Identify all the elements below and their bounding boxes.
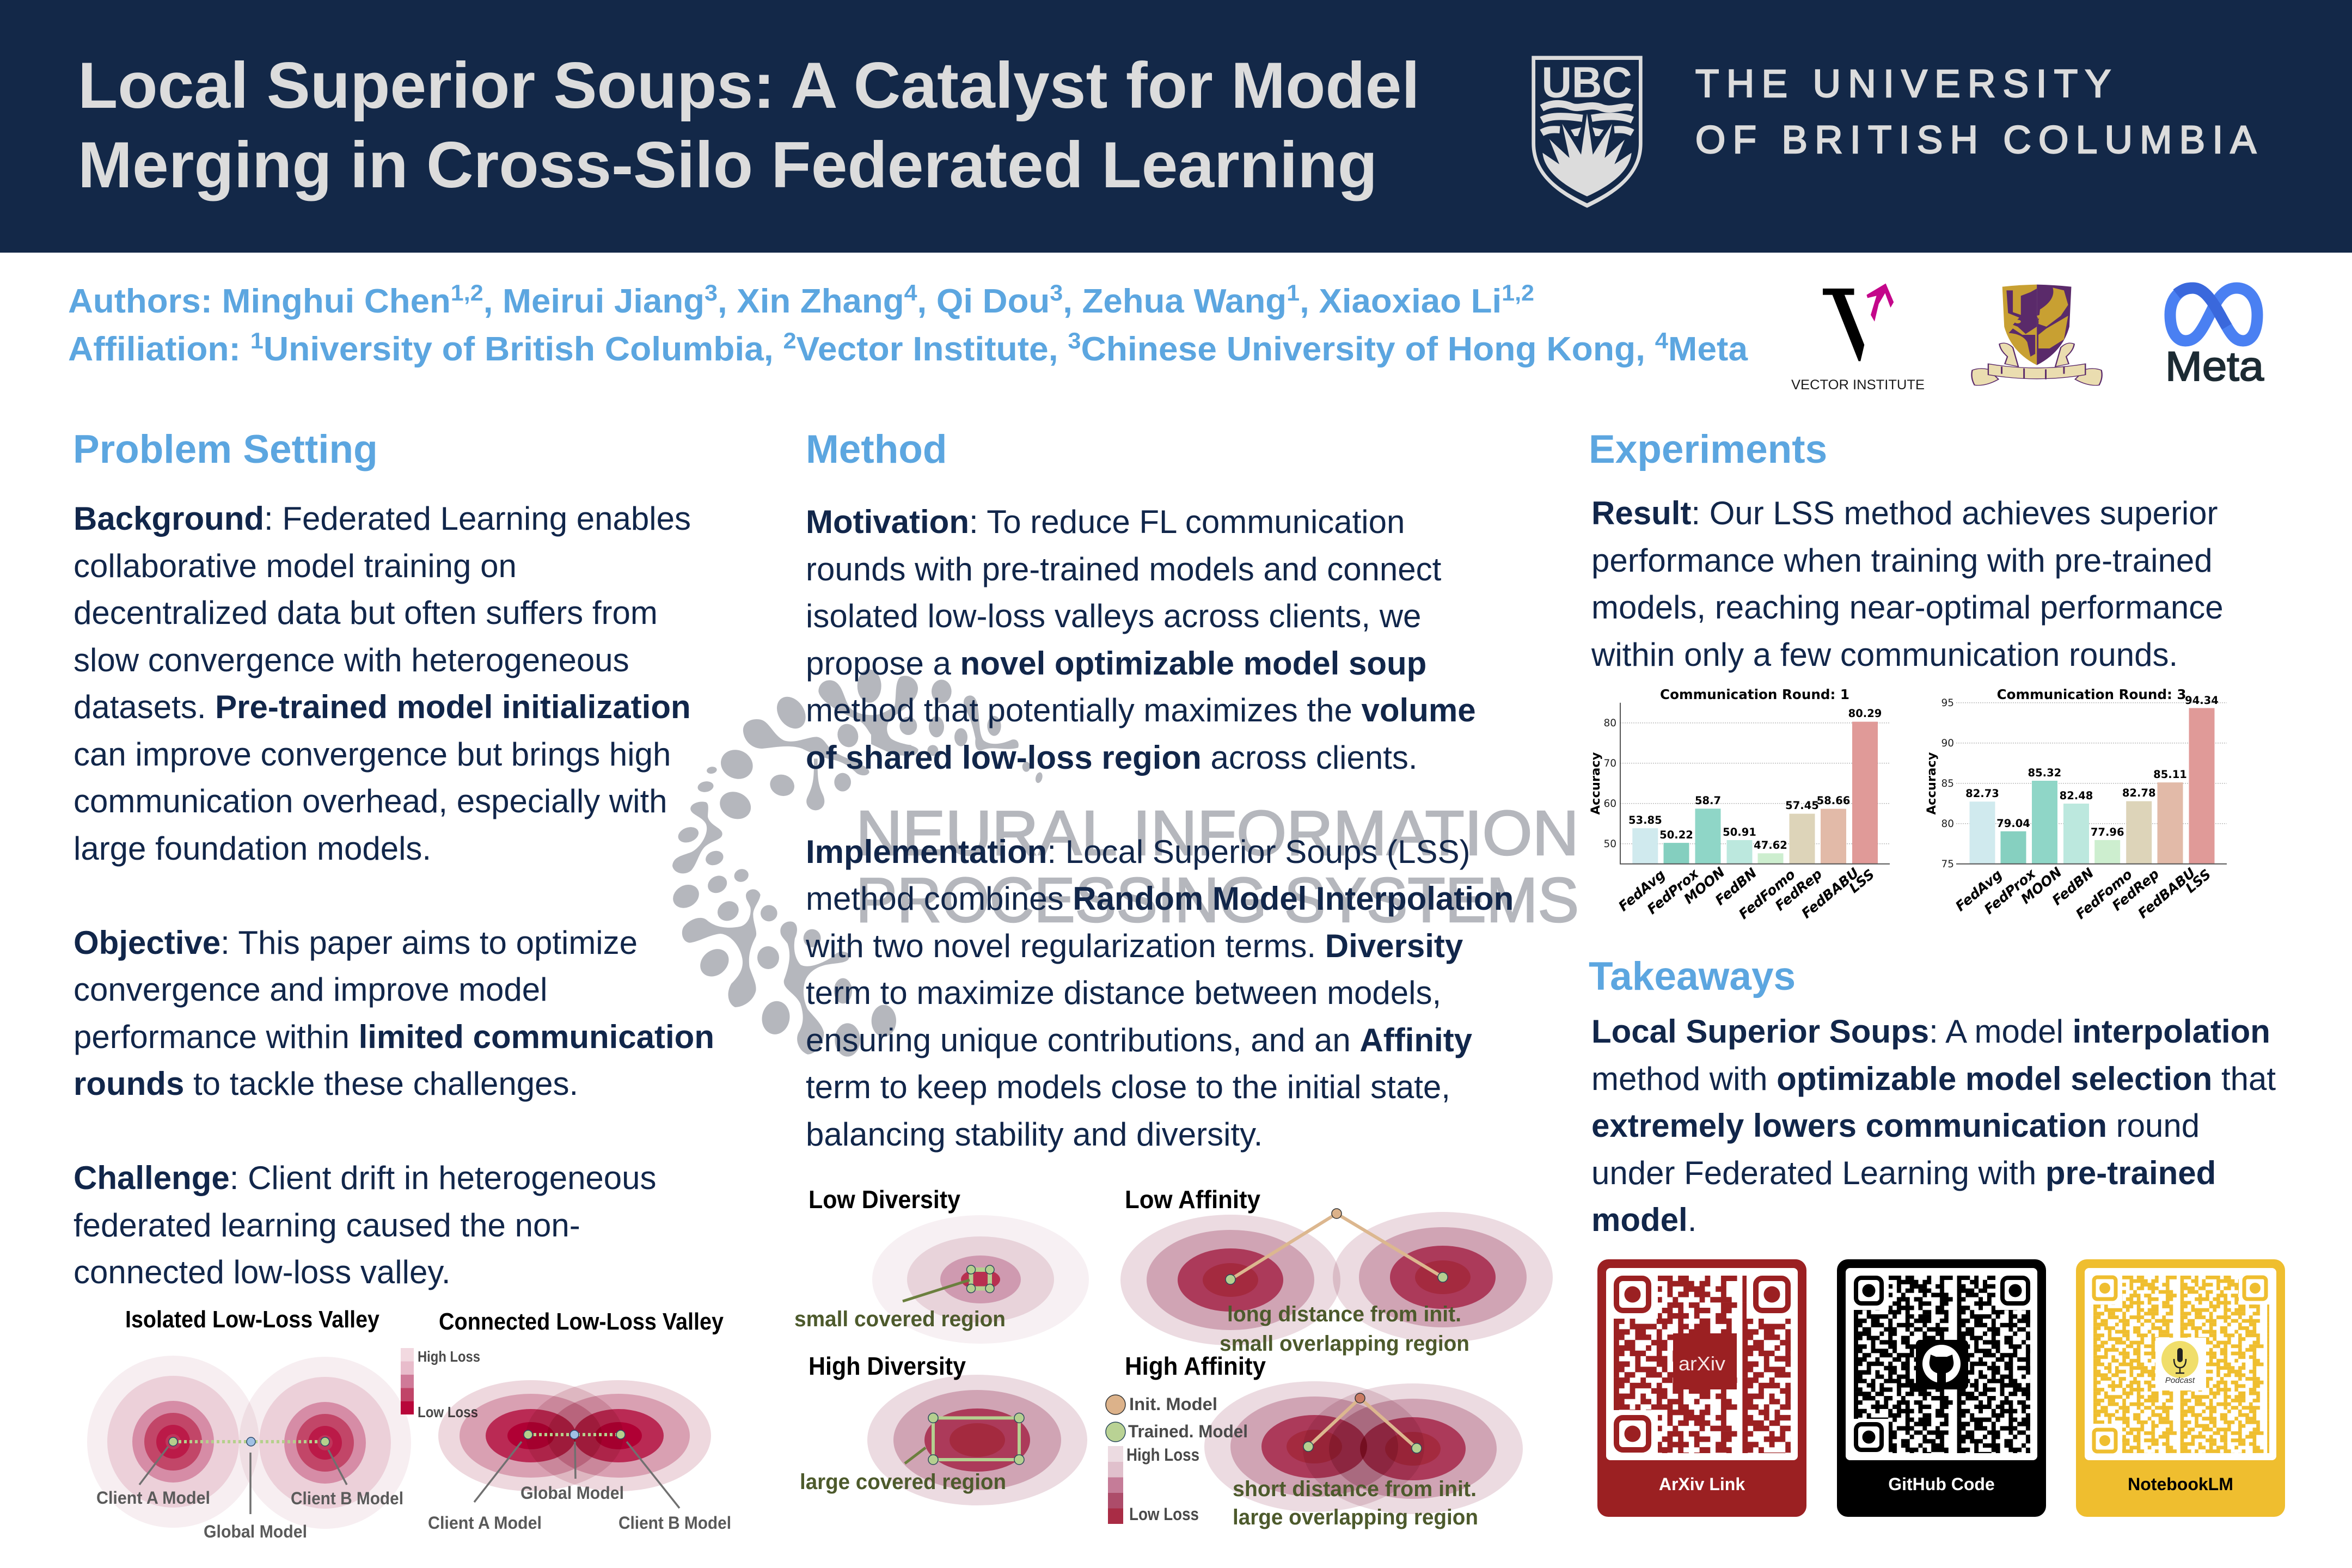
card label: NotebookLM <box>2128 1474 2233 1494</box>
diagram: low diversity <box>794 1185 1089 1344</box>
bar chart: round 1: 60 <box>1603 798 1616 810</box>
card label: GitHub Code <box>1888 1474 1995 1494</box>
legend: loss scale <box>401 1348 480 1420</box>
text: Takeaways body: Local Superior Soups: A model interpolation <box>1591 1013 2270 1050</box>
text: Experiments result <box>1591 495 2224 673</box>
authors and affiliation: University of British Columbia, <box>264 330 783 368</box>
text: Problem Setting body: decentralized data but often suffers from <box>74 595 658 631</box>
heading: Takeaways: Takeaways <box>1589 954 1796 999</box>
authors and affiliation: 3 <box>1050 280 1063 305</box>
text: Method body: with two novel regularization terms. Diversity <box>806 928 1463 964</box>
label: Low Diversity <box>808 1185 960 1214</box>
text: Problem Setting body: datasets. Pre-trained model initialization <box>74 689 691 725</box>
diagram: connected low-loss valley <box>428 1308 731 1533</box>
poster title: Local Superior Soups: A Catalyst for Model <box>78 49 1420 122</box>
legend: model and loss: Low Loss <box>1129 1504 1199 1524</box>
bar chart: round 3: 85 <box>1941 778 1954 789</box>
heading: Method: Method <box>806 427 947 471</box>
text: Takeaways body: extremely lowers communication round <box>1591 1107 2200 1144</box>
bar chart: round 1: 80 <box>1603 718 1616 729</box>
diagram: high diversity: large covered region <box>800 1470 1006 1494</box>
text: Problem Setting body: communication overhead, especially with <box>74 783 667 819</box>
bar chart: round 1: MOON <box>1681 864 1728 907</box>
logo: CUHK crest <box>1971 284 2103 385</box>
bar chart: round 3: 82.78 <box>2122 787 2156 799</box>
diagram: isolated low-loss valley: Client A Model <box>96 1488 210 1508</box>
bar chart: round 3: Accuracy <box>1925 752 1939 814</box>
bar chart: round 1: 50 <box>1603 838 1616 850</box>
bar chart: round 3: 77.96 <box>2091 826 2124 838</box>
bar chart: round 3: FedBABU <box>2135 865 2198 922</box>
bar chart: round 1: LSS <box>1846 866 1877 896</box>
bar chart: round 3: 82.48 <box>2060 789 2093 802</box>
text: Method body: ensuring unique contributions, and an Affinity <box>806 1021 1472 1058</box>
authors and affiliation: 1,2 <box>451 280 483 305</box>
text: Method body: isolated low-loss valleys across clients, we <box>806 598 1421 634</box>
diagram: connected low-loss valley: Client A Model <box>428 1513 542 1533</box>
text: Problem Setting body <box>74 500 714 1290</box>
chart title: Communication Round: 1 <box>1660 687 1849 702</box>
icon: podcast microphone: Podcast <box>2165 1376 2195 1385</box>
authors and affiliation: 2 <box>783 328 797 353</box>
heading: Problem Setting: Problem Setting <box>73 427 378 471</box>
authors and affiliation: Meta <box>1668 330 1748 368</box>
authors and affiliation: , Xiaoxiao Li <box>1300 283 1502 320</box>
diagram: low affinity: small overlapping region <box>1220 1332 1469 1356</box>
diagram: high diversity <box>800 1352 1087 1505</box>
legend: model and loss: High Loss <box>1126 1445 1199 1465</box>
bar chart: round 1: 80.29 <box>1848 707 1882 720</box>
text: Method body <box>806 504 1514 1152</box>
diagram: high affinity: short distance from init. <box>1233 1477 1477 1501</box>
bar chart: round 3: MOON <box>2018 864 2065 907</box>
text: Problem Setting body: federated learning caused the non- <box>74 1206 580 1244</box>
text: Problem Setting body: Objective: This paper aims to optimize <box>74 924 638 960</box>
authors and affiliation: 4 <box>904 280 917 305</box>
heading: Experiments: Experiments <box>1589 427 1827 471</box>
bar chart: round 3: 95 <box>1941 697 1954 709</box>
text: Experiments result: models, reaching near-optimal performance <box>1591 589 2224 626</box>
bar chart: round 3: FedAvg <box>1952 866 2005 914</box>
bar chart: round 1: FedBABU <box>1798 865 1862 922</box>
diagram title: Connected Low-Loss Valley <box>439 1308 724 1335</box>
authors and affiliation <box>68 280 1748 368</box>
icon: GitHub octocat <box>1922 1345 1961 1383</box>
bar chart: round 3: LSS <box>2183 866 2214 896</box>
bar chart: round 3: FedRep <box>2109 866 2162 914</box>
bar chart: round 3: 75 <box>1941 859 1954 870</box>
card: arXiv QR <box>1597 1259 1806 1517</box>
bar chart: round 3: FedProx <box>1981 865 2039 917</box>
authors and affiliation: , Qi Dou <box>917 283 1050 320</box>
authors and affiliation: , Xin Zhang <box>718 283 904 320</box>
bar chart: round 3 <box>1925 687 2227 922</box>
text: Problem Setting body: connected low-loss valley. <box>74 1254 451 1290</box>
bar chart: round 3: FedBN <box>2049 865 2097 909</box>
watermark: NeurIPS logo: NEURAL INFORMATION <box>856 798 1579 868</box>
legend: model and loss: Init. Model <box>1129 1394 1217 1414</box>
bar chart: round 1: FedProx <box>1644 865 1702 917</box>
logo: Meta <box>2165 282 2265 387</box>
text: Problem Setting body: can improve convergence but brings high <box>74 736 671 772</box>
bar chart: round 1: FedBN <box>1712 865 1760 909</box>
card label: ArXiv Link <box>1659 1474 1745 1494</box>
bar chart: round 3: 80 <box>1941 818 1954 830</box>
bar chart: round 1: 50.22 <box>1659 829 1693 841</box>
authors and affiliation: 3 <box>1068 328 1081 353</box>
diagram: connected low-loss valley: Client B Model <box>618 1513 731 1533</box>
legend: loss scale: Low Loss <box>418 1404 478 1420</box>
authors and affiliation: 1 <box>1287 280 1300 305</box>
bar chart: round 1: 53.85 <box>1628 814 1662 826</box>
text: Takeaways body: under Federated Learning with pre-trained <box>1591 1154 2216 1191</box>
poster title: Merging in Cross-Silo Federated Learning <box>78 128 1377 201</box>
text: Experiments result: performance when training with pre-trained <box>1591 542 2213 578</box>
diagram: high affinity: large overlapping region <box>1233 1505 1478 1529</box>
bar chart: round 1: FedFomo <box>1736 866 1798 922</box>
diagram: high affinity <box>1125 1352 1523 1529</box>
bar chart: round 1: Accuracy <box>1589 752 1603 814</box>
bar chart: round 1: 58.66 <box>1817 794 1850 807</box>
authors and affiliation: , Meirui Jiang <box>483 283 705 320</box>
text: Takeaways body <box>1591 1013 2276 1238</box>
chart title: Communication Round: 3 <box>1997 687 2186 702</box>
text: Method body: propose a novel optimizable model soup <box>806 645 1426 682</box>
diagram title: Isolated Low-Loss Valley <box>125 1306 379 1333</box>
legend: loss scale: High Loss <box>418 1348 480 1365</box>
text: Method body: rounds with pre-trained models and connect <box>806 551 1441 587</box>
text: Experiments result: within only a few communication rounds. <box>1591 636 2178 673</box>
text: Method body: Implementation: Local Superior Soups (LSS) <box>806 833 1470 870</box>
logo: UBC shield: UBC <box>1542 58 1632 106</box>
authors and affiliation: Affiliation: <box>68 330 235 368</box>
university wordmark: THE UNIVERSITY <box>1695 63 2111 106</box>
icon: podcast microphone <box>2161 1341 2198 1385</box>
text: Problem Setting body: Background: Federated Learning enables <box>74 500 691 537</box>
bar chart: round 3: 85.11 <box>2153 768 2187 781</box>
bar chart: round 3: FedFomo <box>2073 866 2135 922</box>
bar chart: round 1: 70 <box>1603 758 1616 769</box>
bar chart: round 3: 85.32 <box>2028 767 2061 779</box>
text: Problem Setting body: Challenge: Client drift in heterogeneous <box>74 1160 657 1196</box>
bar chart: round 3: 82.73 <box>1965 787 1999 800</box>
authors and affiliation: 3 <box>705 280 718 305</box>
diagram: low affinity <box>1120 1185 1553 1356</box>
text: Method body: of shared low-loss region across clients. <box>806 739 1418 775</box>
text: Method body: Motivation: To reduce FL communication <box>806 504 1405 540</box>
bar chart: round 1: 50.91 <box>1723 826 1756 838</box>
text: Takeaways body: method with optimizable model selection that <box>1591 1061 2276 1097</box>
poster title <box>78 49 1420 201</box>
authors and affiliation: 4 <box>1655 328 1669 353</box>
authors and affiliation: Authors: Minghui Chen <box>68 283 441 320</box>
authors and affiliation: Vector Institute, <box>797 330 1068 368</box>
bar chart: round 3: 90 <box>1941 738 1954 749</box>
card: GitHub QR <box>1837 1259 2046 1517</box>
text: Method body: method combines Random Model Interpolation <box>806 880 1514 917</box>
text: Problem Setting body: performance within limited communication <box>74 1018 714 1055</box>
text: Method body: method that potentially maximizes the volume <box>806 692 1476 728</box>
label: Low Affinity <box>1125 1185 1260 1214</box>
header banner <box>0 0 2352 253</box>
legend: model and loss: Trained. Model <box>1128 1422 1248 1441</box>
bar chart: round 1 <box>1589 687 1890 922</box>
logo: UBC shield <box>1532 56 1643 208</box>
text: Method body: term to keep models close to the initial state, <box>806 1069 1450 1105</box>
authors and affiliation: Chinese University of Hong Kong, <box>1081 330 1655 368</box>
card: NotebookLM QR <box>2076 1259 2285 1517</box>
text: Problem Setting body: collaborative model training on <box>74 548 517 584</box>
diagram: low diversity: small covered region <box>794 1307 1006 1331</box>
label: High Diversity <box>808 1352 966 1380</box>
bar chart: round 1: 58.7 <box>1695 794 1721 807</box>
diagram: connected low-loss valley: Global Model <box>520 1483 624 1503</box>
bar chart: round 1: FedAvg <box>1615 866 1668 914</box>
authors and affiliation: 1,2 <box>1502 280 1534 305</box>
logo: Vector Institute: VECTOR INSTITUTE <box>1791 377 1925 393</box>
logo: Vector Institute <box>1791 283 1925 393</box>
arXiv logo text: arXiv <box>1679 1352 1725 1375</box>
authors and affiliation: 1 <box>250 328 264 353</box>
university wordmark: OF BRITISH COLUMBIA <box>1695 119 2257 162</box>
text: Problem Setting body: convergence and improve model <box>74 971 548 1008</box>
label: High Affinity <box>1125 1352 1266 1380</box>
bar chart: round 1: FedRep <box>1772 866 1825 914</box>
bar chart: round 3: 94.34 <box>2185 694 2219 707</box>
university wordmark <box>1695 63 2257 162</box>
bar chart: round 3: 79.04 <box>1996 817 2030 830</box>
authors and affiliation: , Zehua Wang <box>1063 283 1287 320</box>
text: Problem Setting body: slow convergence with heterogeneous <box>74 641 629 678</box>
text: Method body: term to maximize distance between models, <box>806 975 1441 1011</box>
watermark: NeurIPS logo: PROCESSING SYSTEMS <box>856 865 1579 935</box>
text: Method body: balancing stability and diversity. <box>806 1116 1263 1152</box>
text: Problem Setting body: large foundation models. <box>74 830 431 867</box>
legend: model and loss <box>1106 1394 1248 1524</box>
bar chart: round 1: 57.45 <box>1785 799 1819 812</box>
diagram: low affinity: long distance from init. <box>1227 1302 1461 1326</box>
diagram: isolated low-loss valley: Client B Model <box>291 1489 403 1508</box>
diagram: isolated low-loss valley <box>87 1306 411 1541</box>
text: Experiments result: Result: Our LSS method achieves superior <box>1591 495 2218 531</box>
bar chart: round 1: 47.62 <box>1754 839 1787 852</box>
diagram: isolated low-loss valley: Global Model <box>204 1522 307 1541</box>
text: Takeaways body: model. <box>1591 1202 1696 1238</box>
text: Problem Setting body: rounds to tackle these challenges. <box>74 1065 578 1102</box>
